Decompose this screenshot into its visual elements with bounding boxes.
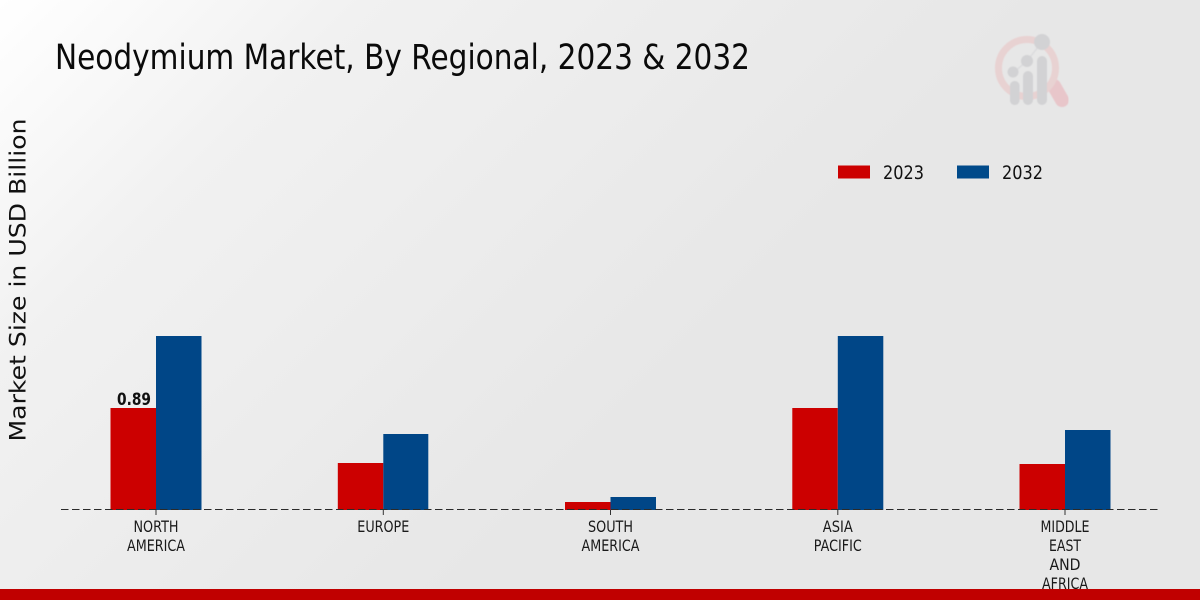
legend — [838, 162, 1043, 184]
label: South America: AMERICA — [582, 536, 640, 555]
label: North America: AMERICA — [127, 536, 185, 555]
title: Neodymium Market, By Regional, 2023 & 2032 — [55, 38, 750, 78]
label: Europe: EUROPE — [357, 517, 409, 536]
bars: Europe — [338, 434, 428, 510]
label: Asia Pacific: ASIA — [823, 517, 853, 536]
label: Middle East and Africa: AFRICA — [1042, 574, 1088, 593]
bars: South America — [565, 497, 656, 510]
footer bar — [0, 589, 1200, 600]
bar chart — [61, 336, 1159, 515]
label: Middle East and Africa: EAST — [1049, 536, 1081, 555]
legend: 2032: 2032 — [1002, 162, 1043, 184]
bars: Asia Pacific — [792, 336, 883, 510]
bars: Middle East and Africa — [1020, 430, 1110, 510]
legend: 2032 — [957, 162, 1043, 184]
bars: North America — [110, 336, 202, 510]
value label: 0.89: 0.89 — [117, 390, 151, 409]
label: North America: NORTH — [134, 517, 178, 536]
logo watermark — [998, 34, 1062, 105]
legend: 2023: 2023 — [883, 162, 924, 184]
label: Middle East and Africa: MIDDLE — [1040, 517, 1090, 536]
y-axis title: Market Size in USD Billion — [6, 118, 32, 442]
x-axis labels — [127, 517, 1090, 593]
legend: 2023 — [838, 162, 924, 184]
label: South America: SOUTH — [588, 517, 633, 536]
label: Middle East and Africa: AND — [1050, 555, 1080, 574]
label: Asia Pacific: PACIFIC — [814, 536, 862, 555]
